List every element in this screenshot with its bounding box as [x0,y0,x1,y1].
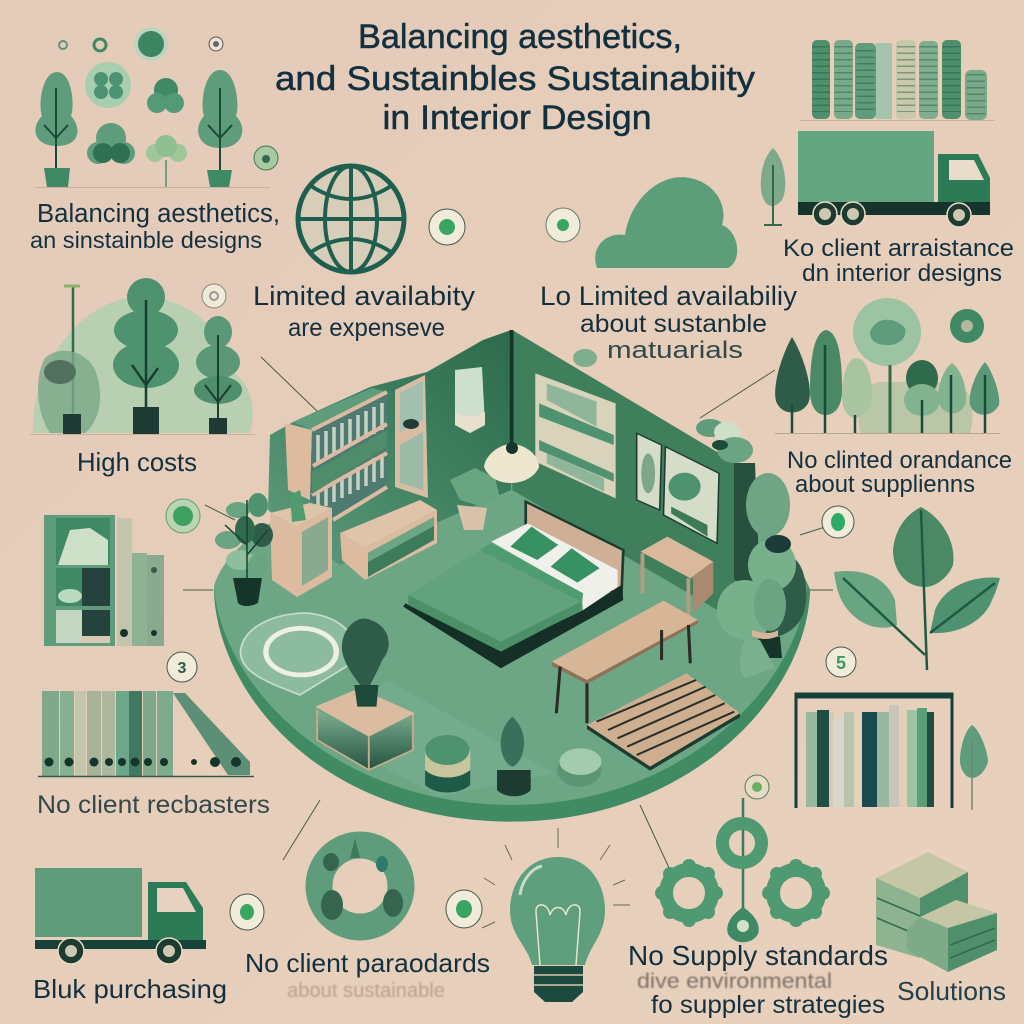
text: limited availability left: Limited availabity [253,281,476,311]
icon: number 5: 5 [836,653,846,673]
stool and cushion [450,468,500,530]
text: standards about suppliers [787,447,1012,498]
icon: recycling ring [319,838,403,927]
icon: delivery truck top right [798,131,990,227]
icon: marker dot ring [446,890,482,928]
side stand [270,490,332,597]
icon: marker dot trees [202,284,226,308]
tree plant right side [717,463,806,678]
icon: rolls top right [800,40,995,120]
text: balancing aesthetics [30,200,280,253]
icon: binders and shelf left [44,515,164,646]
text: standards about suppliers: about supplienns [795,471,975,498]
icon: light bulb [482,828,630,1002]
hanging wall lamp [455,367,485,433]
text: bulk purchasing: Bluk purchasing [33,974,227,1004]
icon: delivery truck bottom left [35,868,206,964]
icon: marker dot right of room [822,506,854,538]
title: in Interior Design [382,99,652,137]
text: standards about suppliers: No clinted orandance [787,447,1012,474]
tall mirror shelf [395,375,428,498]
text: limited availability right: matuarials [607,337,743,364]
text: client assistance [783,235,1014,287]
text: balancing aesthetics: an sinstainble designs [30,227,262,253]
icon: marker dot truck [230,894,264,930]
icon group: trees and leaves top left [35,27,278,188]
sideboard [340,500,437,580]
icon: cloud [595,177,737,268]
icon group: forest right [775,298,1000,434]
text: limited availability right [540,281,798,364]
text: limited availability right: about sustanble [580,310,767,338]
text: client rebates: No client recbasters [37,791,270,819]
text: supply standards: No Supply standards [628,940,888,971]
icon: binders with triangle [38,691,254,777]
pendant lamp [484,330,539,483]
text: client standards [245,948,490,1002]
icon: small plant right [960,725,988,810]
text: solutions: Solutions [897,976,1006,1006]
icon: big leaf plant [834,507,1000,670]
connector lines [183,357,833,870]
icon: small tree by truck [761,148,785,225]
plant left [215,493,273,606]
icon: number 3 [167,652,197,682]
text: client assistance: Ko client arraistance [783,235,1014,262]
text: supply standards: fo suppler strategies [651,991,885,1019]
icon: marker dot globe [429,209,465,245]
text: supply standards [628,940,888,1019]
icon: stacked boxes [876,852,997,972]
leaves on top of right wall [573,349,753,463]
icon group: trees left [30,278,255,434]
icon: gears and connector [655,775,830,942]
text: limited availability left: are expenseve [288,314,445,342]
text: client standards: No client paraodards [245,948,490,978]
text: client standards: about sustainable [287,980,445,1002]
text: client assistance: dn interior designs [802,260,1002,287]
icon: number 5 [826,647,856,677]
text: balancing aesthetics: Balancing aesthetics, [37,200,280,228]
icon: number 3: 3 [178,660,187,677]
icon: globe [298,166,404,272]
title: and Sustainbles Sustainabiity [275,60,755,98]
bookshelf [285,388,387,520]
icon: marker dot left of room [166,499,200,533]
text: limited availability right: Lo Limited availabiliy [540,281,798,311]
text: limited availability left [253,281,476,342]
text: high costs: High costs [77,447,197,477]
icon: marker dot cloud [546,208,580,242]
left wall [268,330,511,565]
title: Balancing aesthetics, [358,18,682,56]
room base: disc, walls, bed and floor items [214,330,810,822]
central room illustration [214,330,810,822]
title [275,18,755,137]
text: supply standards: dive environmental [637,970,832,993]
icon: clothes rack [796,694,952,808]
